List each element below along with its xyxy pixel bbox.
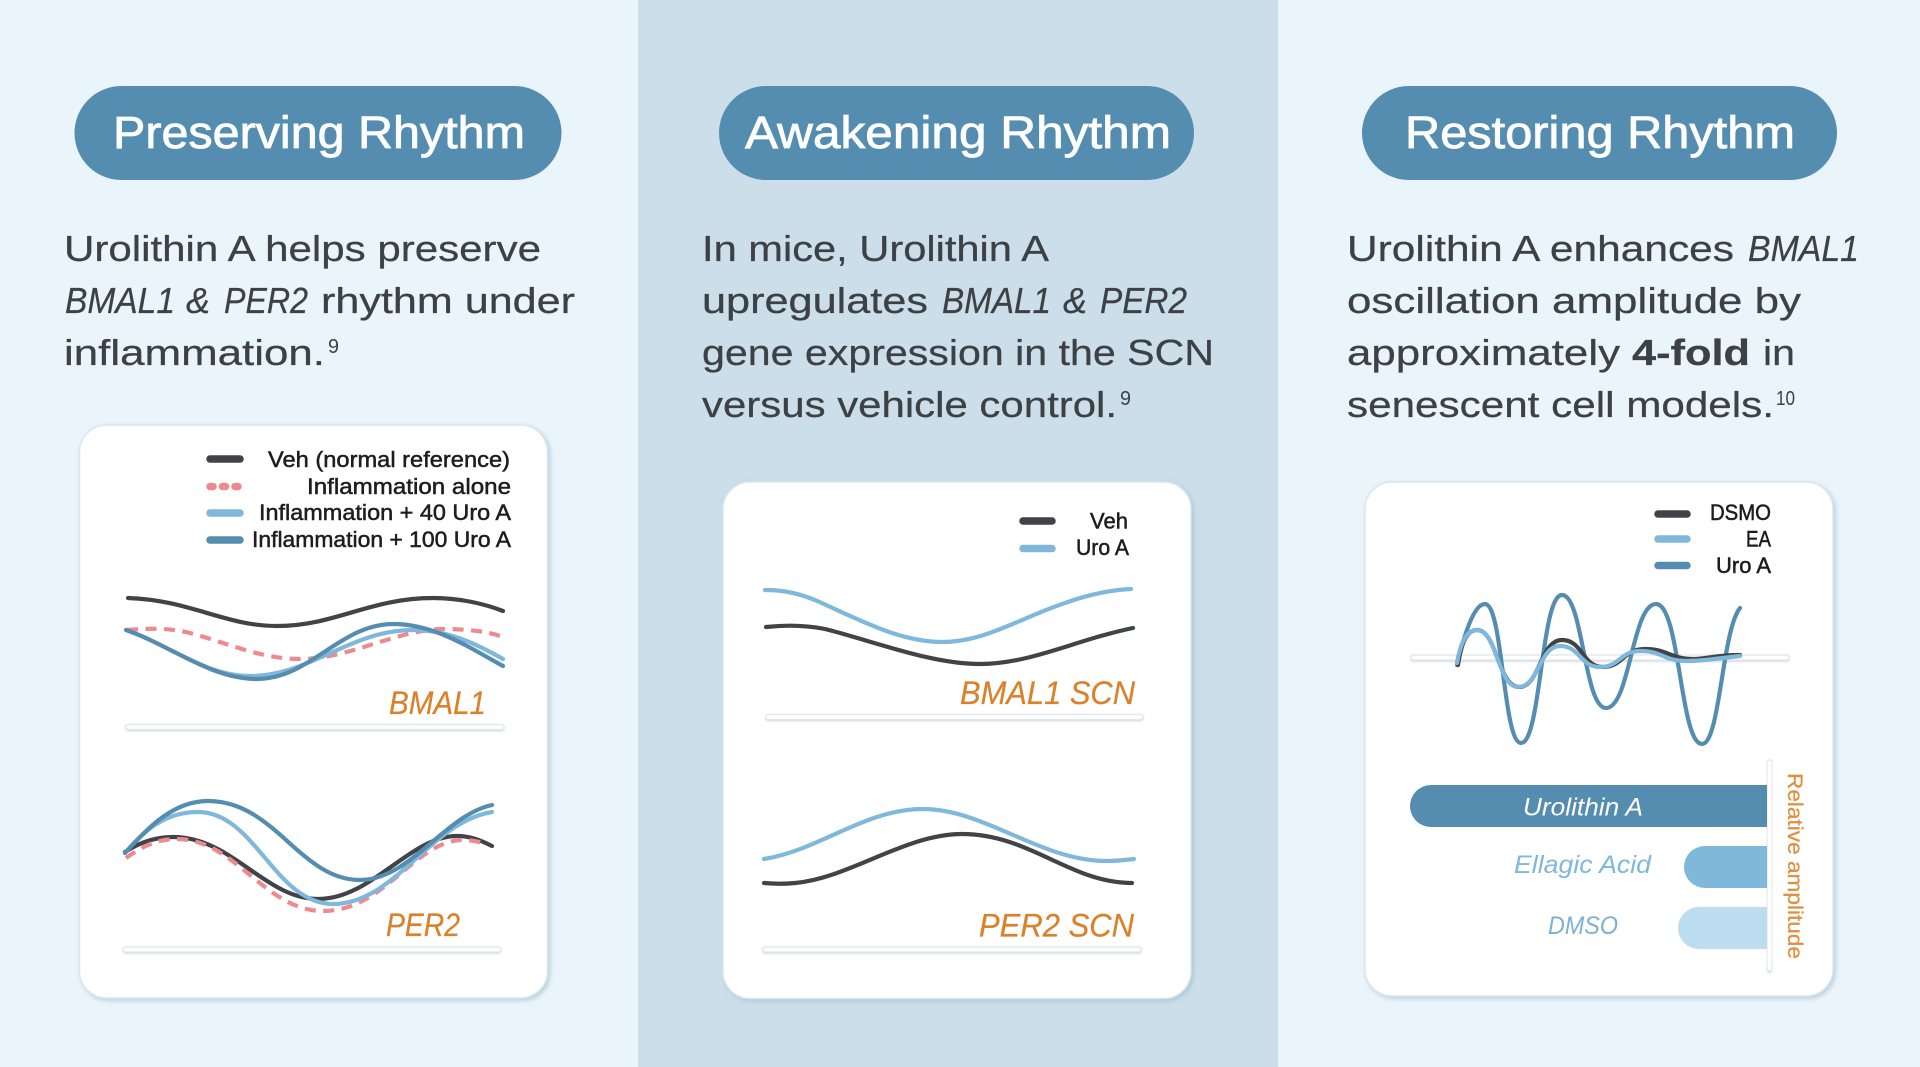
text block: preserving description: Urolithin A helps preserve: [64, 228, 541, 269]
chart card: BMAL1 and PER2 under inflammation: [80, 425, 548, 998]
axis label: relative amplitude: Relative amplitude: [1783, 773, 1807, 959]
text block: preserving description: &: [186, 280, 210, 321]
bar: DMSO: DMSO: [1548, 912, 1618, 940]
line chart: PER2 SCN: PER2 SCN: [979, 908, 1135, 944]
background: middle column band: [638, 0, 1278, 1067]
legend: DSMO: [1710, 500, 1771, 525]
text block: restoring description: [1347, 228, 1859, 425]
bar: Ellagic Acid: Ellagic Acid: [1514, 851, 1652, 879]
background: right column: [1278, 0, 1920, 1067]
heading: Preserving Rhythm: Preserving Rhythm: [113, 107, 525, 158]
legend: EA: [1746, 526, 1771, 552]
heading: Awakening Rhythm: [719, 86, 1194, 180]
bar: Ellagic Acid: [1514, 846, 1767, 888]
bar chart: relative amplitude: [1410, 760, 1807, 971]
line chart: BMAL1: [126, 598, 504, 730]
text block: preserving description: rhythm under: [321, 280, 575, 321]
heading: Preserving Rhythm: [74, 86, 562, 180]
text block: restoring description: 4-fold: [1632, 332, 1750, 373]
bar: Urolithin A: [1410, 785, 1767, 827]
chart card: oscillation amplitude: [1365, 482, 1833, 996]
text block: restoring description: oscillation amplitude by: [1347, 280, 1801, 321]
panel: preserving rhythm: [64, 86, 575, 998]
background: left column: [0, 0, 638, 1067]
panel: restoring rhythm: [1347, 86, 1859, 996]
text block: awakening description: [702, 228, 1214, 425]
legend: [1658, 500, 1771, 578]
text block: restoring description: Urolithin A enhances: [1347, 228, 1734, 269]
text block: awakening description: versus vehicle control.: [702, 384, 1117, 425]
line chart: BMAL1: BMAL1: [389, 685, 486, 721]
heading: Restoring Rhythm: Restoring Rhythm: [1405, 107, 1795, 158]
text block: awakening description: gene expression in the SCN: [702, 332, 1214, 373]
text block: restoring description: 10: [1776, 388, 1795, 410]
chart card: SCN gene expression: [723, 482, 1191, 998]
bar: Urolithin A: Urolithin A: [1523, 794, 1643, 822]
legend: Inflammation + 100 Uro A: [252, 527, 511, 552]
text block: restoring description: BMAL1: [1748, 228, 1859, 269]
text block: awakening description: upregulates: [702, 280, 928, 321]
panel: awakening rhythm: [702, 86, 1214, 998]
text block: restoring description: senescent cell models.: [1347, 384, 1774, 425]
heading: Awakening Rhythm: Awakening Rhythm: [745, 107, 1171, 158]
text block: awakening description: 9: [1120, 388, 1131, 410]
text block: awakening description: &: [1063, 280, 1087, 321]
line chart: PER2 SCN: [763, 809, 1141, 952]
text block: preserving description: 9: [328, 336, 339, 358]
text block: restoring description: in: [1763, 332, 1795, 373]
text block: preserving description: PER2: [224, 280, 308, 321]
text block: preserving description: BMAL1: [65, 280, 175, 321]
legend: [1023, 508, 1129, 560]
line chart: oscillation waves: [1411, 595, 1789, 744]
legend: Uro A: [1716, 553, 1771, 578]
text block: awakening description: BMAL1: [942, 280, 1051, 321]
text block: awakening description: In mice, Urolithin A: [702, 228, 1049, 269]
line chart: BMAL1 SCN: BMAL1 SCN: [960, 675, 1136, 711]
line chart: PER2: [124, 801, 500, 952]
line chart: PER2: PER2: [386, 907, 460, 943]
heading: Restoring Rhythm: [1362, 86, 1837, 180]
legend: Inflammation alone: [307, 474, 511, 499]
legend: Veh (normal reference): [268, 447, 510, 472]
text block: restoring description: approximately: [1347, 332, 1620, 373]
legend: Inflammation + 40 Uro A: [259, 500, 511, 525]
legend: Veh: [1090, 508, 1128, 534]
text block: preserving description: inflammation.: [64, 332, 325, 373]
legend: Uro A: [1076, 535, 1129, 560]
text block: awakening description: PER2: [1100, 280, 1187, 321]
legend: [210, 447, 511, 552]
line chart: BMAL1 SCN: [765, 589, 1143, 720]
bar: DMSO: [1548, 907, 1767, 949]
text block: preserving description: [64, 228, 575, 373]
